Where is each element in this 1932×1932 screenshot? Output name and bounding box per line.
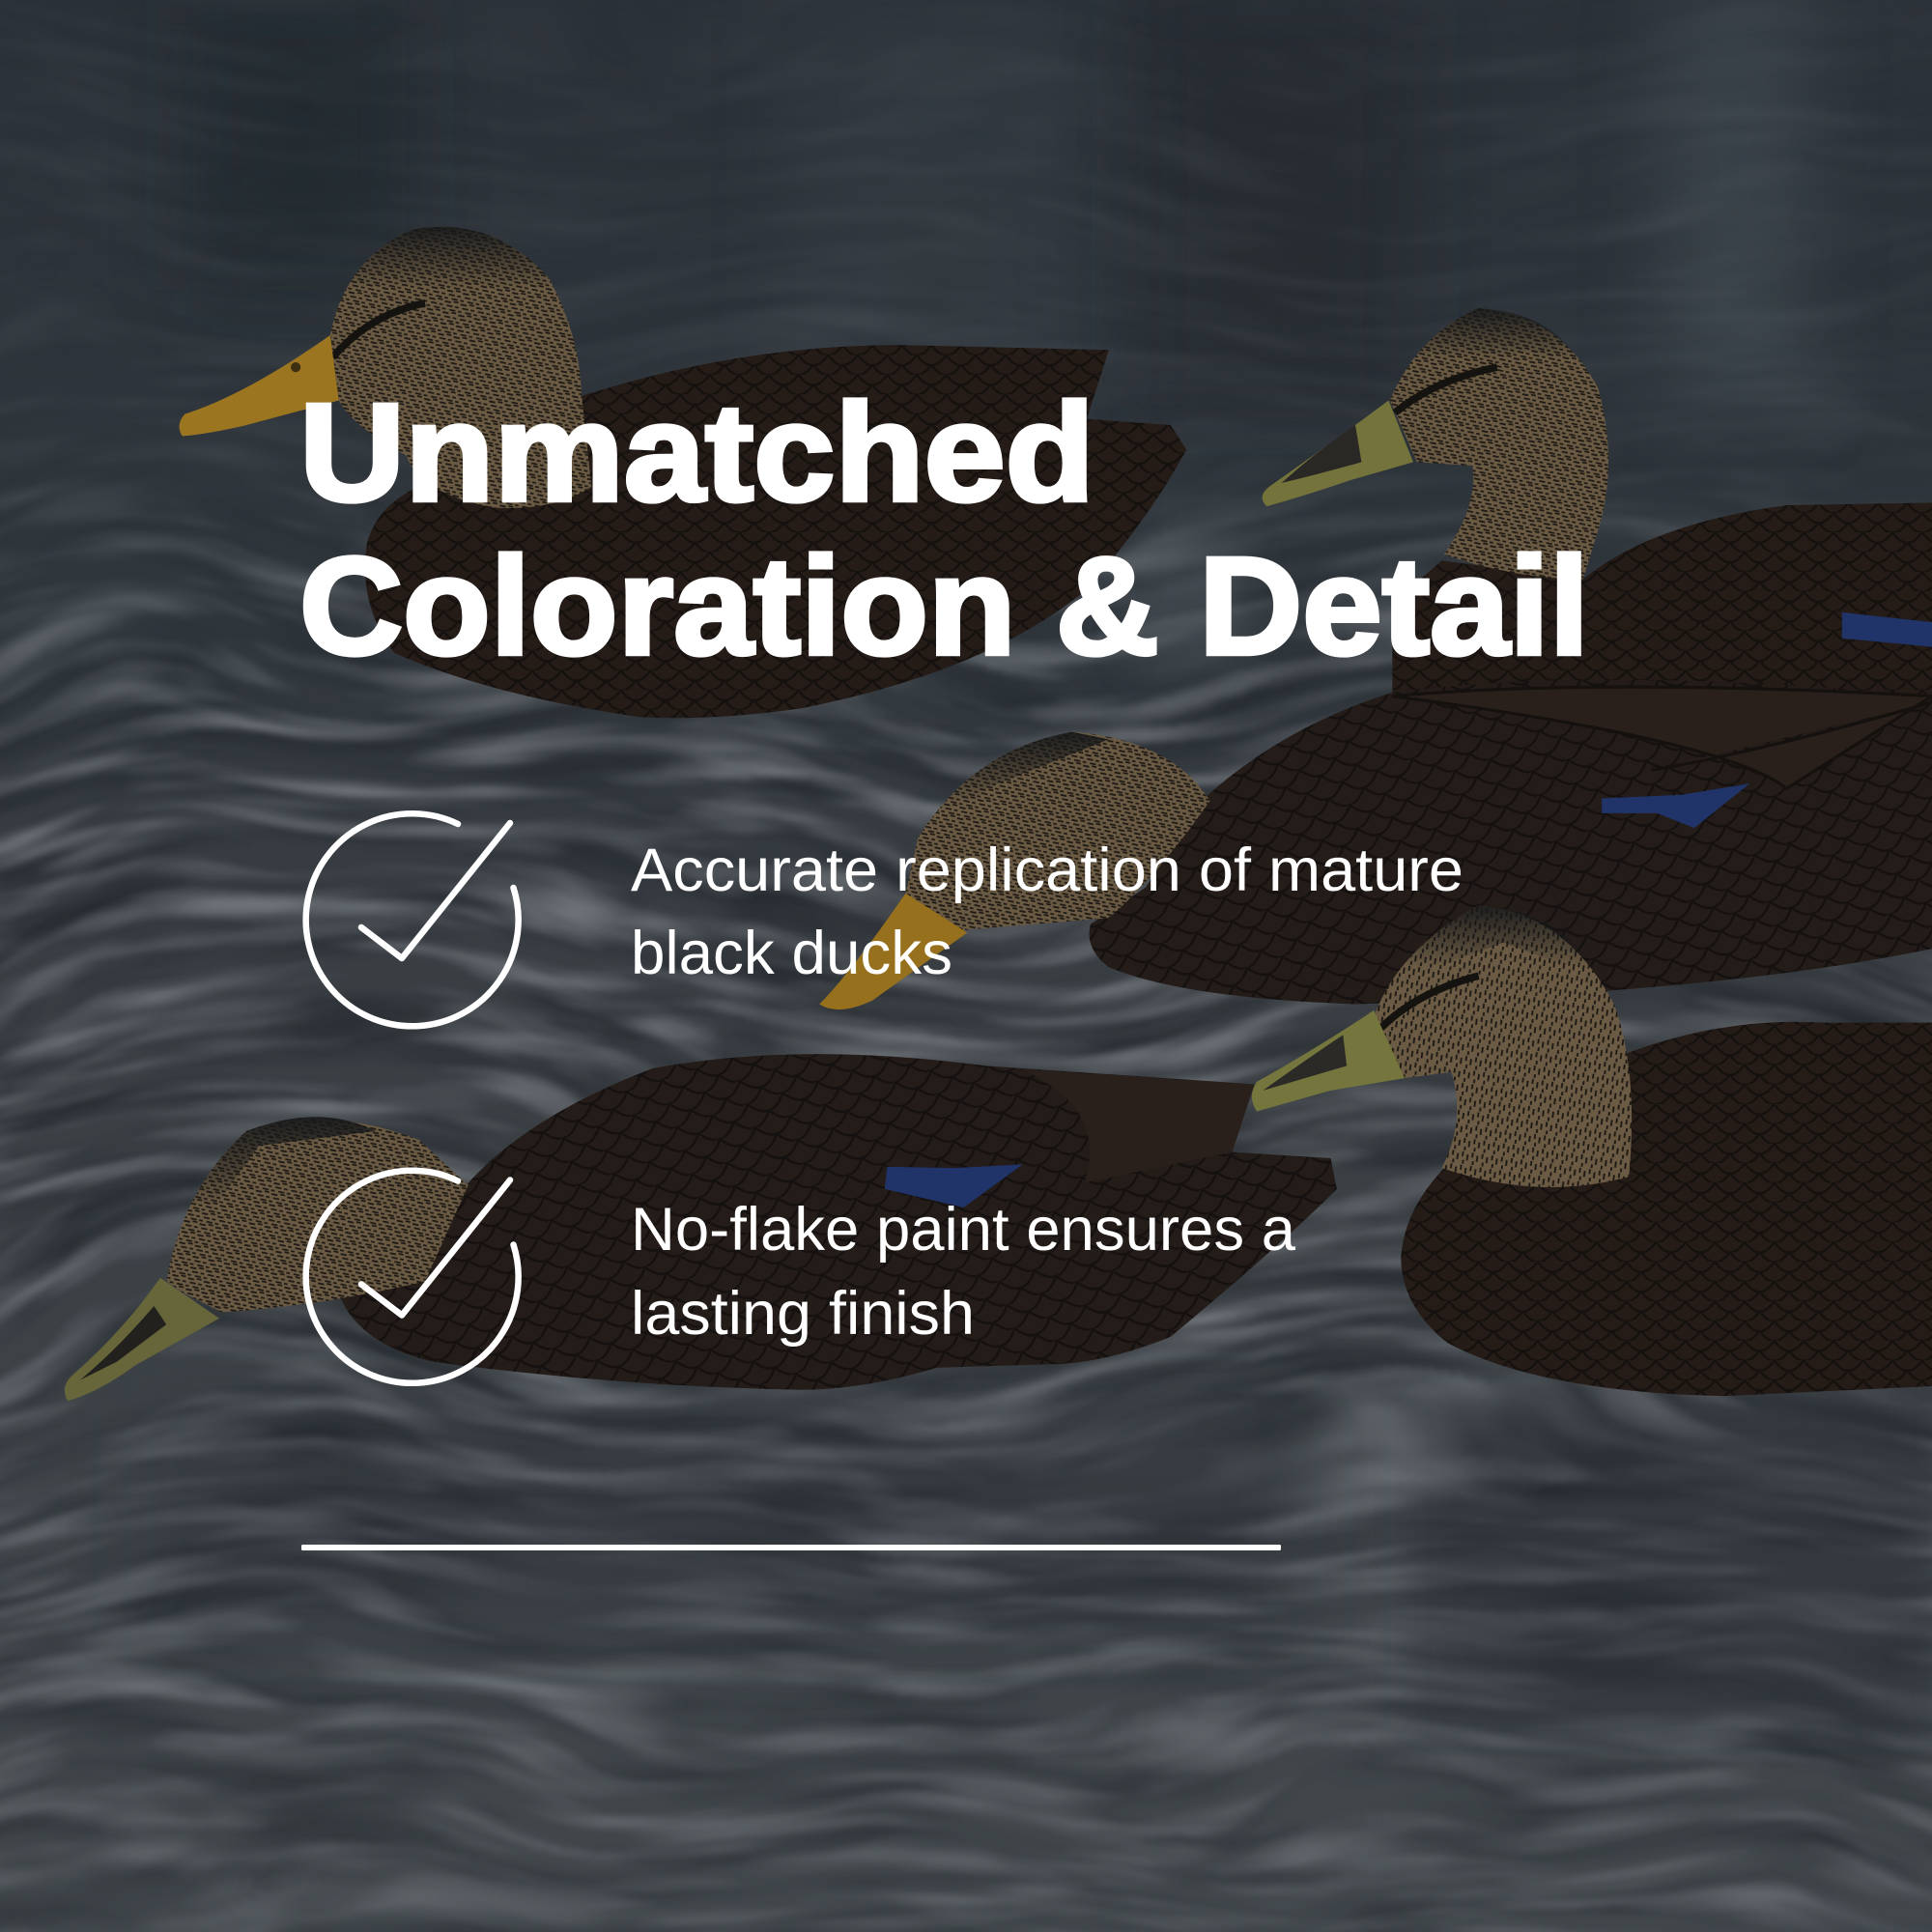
text: no-flake paint: lasting finish xyxy=(631,1280,975,1348)
text: accurate replication: black ducks xyxy=(631,920,952,987)
text: accurate replication: Accurate replication of mature xyxy=(631,837,1463,904)
duck: lower left, head down xyxy=(65,1054,1337,1401)
text: accurate replication xyxy=(631,837,1463,987)
duck: middle, head down xyxy=(819,680,1932,1009)
text: no-flake paint xyxy=(631,1196,1296,1348)
title: Coloration & Detail xyxy=(299,528,1589,684)
text: no-flake paint: No-flake paint ensures a xyxy=(631,1196,1296,1264)
icon: check in circle xyxy=(306,1171,519,1383)
divider line xyxy=(301,1545,1281,1550)
title xyxy=(299,375,1589,684)
icon: check in circle xyxy=(306,813,519,1026)
duck: lower right xyxy=(1252,905,1932,1396)
title: Unmatched xyxy=(299,375,1094,530)
duck: upper right xyxy=(1263,308,1932,715)
feature 1 xyxy=(306,813,1463,1026)
feature 2 xyxy=(306,1171,1296,1383)
duck: top left xyxy=(179,227,1186,718)
ducks illustration xyxy=(65,227,1932,1401)
